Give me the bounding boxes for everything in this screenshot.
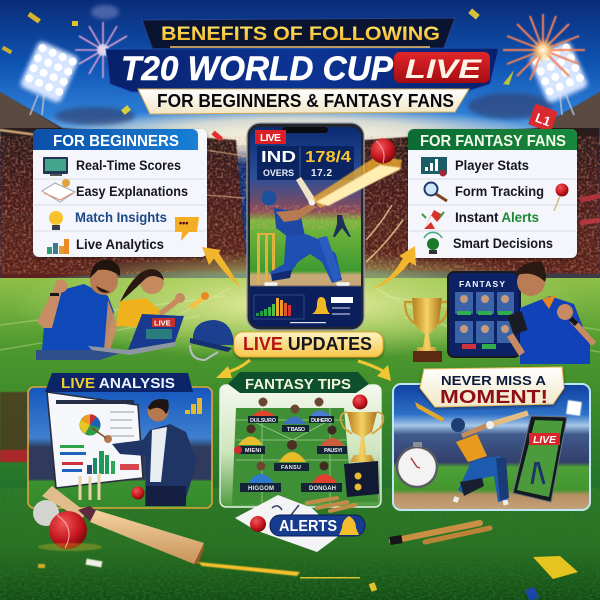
- header: for beginners: FOR BEGINNERS: [53, 133, 179, 150]
- stumps: [257, 233, 275, 286]
- icon: alerts bell: [339, 516, 359, 535]
- item: live analytics: Live Analytics: [76, 237, 164, 252]
- banner: never miss a moment: NEVER MISS A: [441, 373, 547, 388]
- trophy and ball: [341, 394, 383, 497]
- foreground grass: [0, 488, 600, 600]
- item: match insights: [49, 210, 167, 230]
- laptop: [88, 314, 184, 355]
- fantasy tablet: [448, 272, 520, 357]
- fan: man with phone: [507, 262, 594, 364]
- foreground confetti: [300, 556, 578, 600]
- pitch formation: [232, 408, 378, 505]
- player tiles: [455, 292, 514, 349]
- header: live analysis: LIVE ANALYSIS: [61, 376, 175, 392]
- wooden stumps on grass: [390, 523, 490, 542]
- players: FANSU: [281, 465, 301, 471]
- item: smart decisions: [424, 232, 553, 254]
- icon: small pin ball: [190, 292, 209, 308]
- batsman: [262, 177, 348, 284]
- outfield light glow: [10, 250, 590, 360]
- fan: woman in yellow: [116, 269, 185, 328]
- banner: t20 world cup live: T20 WORLD CUP: [121, 50, 393, 88]
- chart box: [254, 295, 304, 319]
- item: instant alerts: [422, 210, 539, 229]
- icon: pin ball: [554, 184, 568, 211]
- curved arrows to panels: [224, 360, 385, 373]
- motion trail: [312, 155, 402, 208]
- header: fantasy tips: [228, 372, 369, 393]
- panel: never miss a moment: [393, 367, 590, 510]
- item: easy explanations: [42, 179, 188, 202]
- item: form tracking: Form Tracking: [455, 184, 544, 199]
- panel: live analysis: [28, 373, 212, 508]
- right floodlight: [528, 40, 589, 115]
- cricket ball flying: [370, 138, 396, 164]
- players: T BASO: [287, 427, 306, 433]
- trophy: [405, 298, 449, 362]
- sparks: [38, 543, 300, 576]
- scoreboard: [257, 146, 354, 180]
- item: player stats: [421, 157, 529, 176]
- badge: live: LIVE: [260, 132, 281, 144]
- light streaks: [366, 205, 403, 262]
- cricket bat: [42, 486, 204, 564]
- stumps bundle: [307, 498, 355, 511]
- grass texture: [0, 480, 600, 600]
- banner: benefits of following: [142, 18, 455, 50]
- fantasy tablet: FANTASY: [459, 279, 505, 289]
- red cricket ball: [49, 511, 87, 549]
- icon: L1 badge: [528, 104, 558, 132]
- alerts paper: [235, 495, 340, 552]
- players: PAUSYI: [324, 448, 342, 454]
- header: fantasy tips: FANTASY TIPS: [245, 376, 351, 393]
- players: MIENI: [245, 448, 261, 454]
- left floodlight: [19, 40, 80, 115]
- scoreboard: 17.2: [311, 168, 332, 179]
- stopwatch: [397, 442, 437, 487]
- flying ball streak: [415, 402, 444, 422]
- banner: t20 world cup live: [106, 47, 499, 92]
- item: form tracking: [424, 182, 544, 201]
- white ball: [33, 500, 59, 526]
- legs: [36, 350, 130, 360]
- item: player stats: Player Stats: [455, 158, 529, 173]
- outfield grass: [0, 278, 600, 500]
- panel: for beginners: [33, 129, 207, 257]
- stadium light: [566, 400, 582, 416]
- scoreboard: OVERS: [263, 168, 294, 179]
- stumps and ball: [80, 473, 144, 500]
- title banner: [106, 18, 499, 114]
- mini stats: [331, 297, 353, 314]
- badge: live updates: LIVE UPDATES: [243, 333, 372, 354]
- players: HIGGOM: [248, 486, 274, 492]
- batter in orange: [451, 413, 528, 505]
- item: real-time scores: [43, 157, 181, 176]
- badge: alerts: [270, 515, 365, 536]
- bars: [60, 445, 139, 474]
- panel: for fantasy fans: [408, 129, 577, 258]
- badge: live: [255, 130, 286, 144]
- mown field stripes: [0, 288, 600, 352]
- players: DUHERO: [311, 418, 333, 424]
- background: horizon glow: [60, 105, 540, 165]
- icon: L1 badge: L1: [533, 110, 553, 129]
- boundary advertising strip: [0, 262, 600, 287]
- scoreboard: IND: [261, 149, 296, 166]
- item: instant alerts: Instant Alerts: [455, 210, 539, 225]
- item: live analytics: [47, 237, 164, 254]
- banner: t20 world cup live: LIVE: [405, 54, 482, 84]
- players: [234, 398, 347, 492]
- arrowheads: [216, 365, 391, 381]
- banner: never miss a moment: [420, 367, 564, 407]
- icon: chat bubble: •••: [179, 218, 188, 228]
- fan: man in blue polo: [37, 260, 120, 350]
- laptop: LIVE: [154, 318, 171, 328]
- background: clouds: [55, 5, 552, 125]
- panel: fantasy tips: [220, 372, 383, 507]
- firework left: [75, 22, 131, 78]
- players: DULSURO: [250, 418, 277, 424]
- fielder: [333, 215, 351, 237]
- badge: alerts: ALERTS: [279, 518, 337, 535]
- firework right: [503, 14, 585, 80]
- scoreboard: 178/4: [305, 149, 351, 166]
- helmet: [190, 320, 234, 360]
- item: real-time scores: Real-Time Scores: [76, 158, 181, 173]
- icon: bell: [312, 297, 330, 314]
- item: easy explanations: Easy Explanations: [76, 184, 188, 199]
- presenter: [92, 399, 197, 506]
- small phone: LIVE: [533, 434, 557, 446]
- item: match insights: Match Insights: [75, 210, 167, 225]
- header: for fantasy fans: FOR FANTASY FANS: [420, 133, 566, 150]
- banner: for beginners and fantasy fans: FOR BEGINNERS & FANTASY FANS: [157, 91, 454, 111]
- arrow: phone to fantasy: [370, 246, 416, 290]
- stadium stands left: [0, 92, 247, 286]
- small phone: [513, 416, 567, 502]
- banner: never miss a moment: MOMENT!: [440, 387, 548, 407]
- mini bar icon: [185, 398, 202, 414]
- icon: chat bubble: [175, 217, 199, 241]
- header: for beginners: [33, 129, 198, 150]
- header: live analysis: [45, 373, 193, 392]
- players: DONGAH: [309, 486, 336, 492]
- background: night sky: [0, 0, 600, 145]
- banner: benefits of following: BENEFITS OF FOLLOWING: [161, 24, 440, 45]
- people: beginners fans with laptop: [36, 260, 185, 360]
- pie chart: [80, 414, 100, 436]
- stadium stands right: [364, 92, 600, 286]
- item: smart decisions: Smart Decisions: [453, 236, 553, 251]
- phone: live score: [247, 123, 364, 330]
- arrow: phone to beginners: [202, 247, 241, 288]
- whiteboard chart screen: [47, 392, 143, 488]
- confetti: [2, 8, 514, 142]
- blurred stands at lower left: [0, 392, 28, 462]
